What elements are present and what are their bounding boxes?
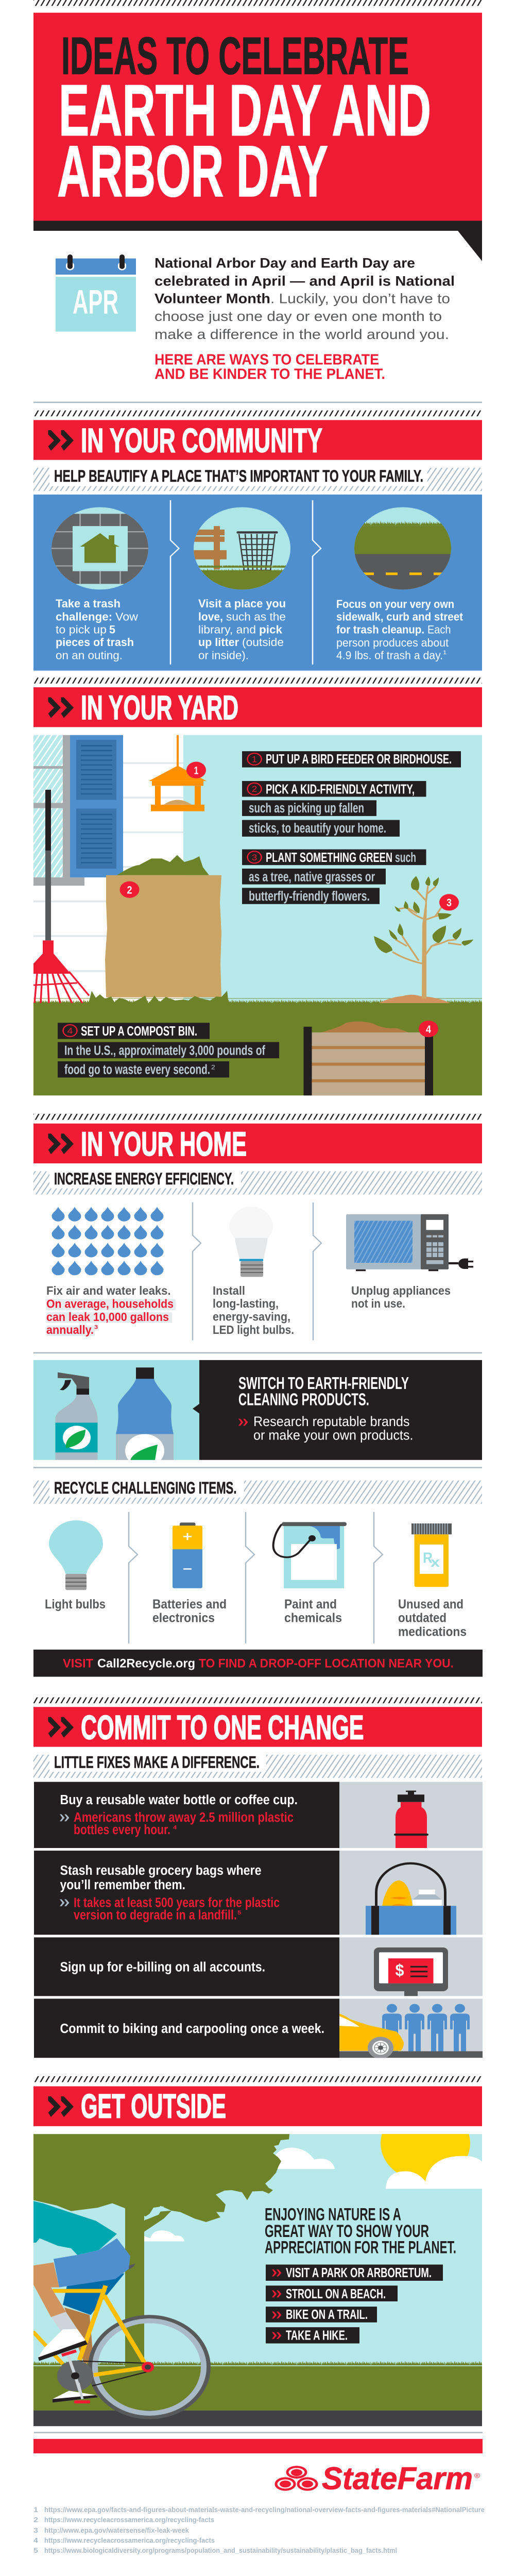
icon: compost bin: [304, 1022, 433, 1095]
callout: compost bin: SET UP A COMPOST BIN.: [81, 1024, 197, 1038]
text: fix leaks: annually.: [46, 1324, 94, 1336]
intro text: Volunteer Month: [154, 291, 270, 307]
text: trash challenge: Vow: [115, 611, 139, 623]
footnotes: https://www.biologicaldiversity.org/programs/population_and_sustainability/sustainability/plastic_bag_facts.html: [44, 2547, 397, 2555]
tag: bike on a trail: BIKE ON A TRAIL.: [286, 2307, 368, 2321]
recycling item labels: electronics: [152, 1611, 215, 1625]
text: unplug appliances: Unplug appliances: [351, 1284, 451, 1298]
text: enjoying nature: ENJOYING NATURE IS A: [265, 2204, 401, 2224]
window and shutter: [33, 735, 123, 886]
text: unplug appliances: not in use.: [351, 1297, 405, 1310]
tag: visit a park: [266, 2265, 443, 2281]
row: reusable bottle: bottles every hour.: [74, 1822, 170, 1837]
number badges: 1: [194, 764, 199, 776]
text: fix leaks: Fix air and water leaks.: [46, 1284, 171, 1298]
text: install LED: energy-saving,: [213, 1310, 290, 1324]
text: trash challenge: challenge:: [56, 611, 112, 623]
row: e-billing: [34, 1937, 483, 1996]
callout: compost bin: [58, 1023, 279, 1077]
text: research brands: [253, 1414, 413, 1443]
clouds: [144, 2148, 482, 2241]
icon: sign and trash can: [191, 507, 290, 592]
tag: visit a park: VISIT A PARK OR ARBORETUM.: [286, 2265, 432, 2280]
subheading: recycle challenging items: [33, 1479, 482, 1504]
icon: spray and cleaner bottles: [56, 1367, 174, 1467]
tag: take a hike: [266, 2327, 359, 2344]
icon: recycle light bulb: [49, 1520, 103, 1590]
intro text: . Luckily, you don’t have to: [270, 291, 450, 307]
text: research brands: or make your own products.: [253, 1428, 413, 1443]
text: focus on your sidewalk: sidewalk, curb and street: [336, 611, 463, 623]
footnotes: [33, 2506, 485, 2555]
footnotes: 3: [33, 2527, 38, 2534]
text: trash challenge: pieces of trash: [56, 636, 134, 649]
footnotes: 1: [33, 2506, 38, 2514]
row: reusable grocery bags: Stash reusable grocery bags where: [60, 1863, 261, 1877]
text: trash challenge: [56, 598, 139, 662]
title banner: [33, 13, 482, 261]
text: visit a place: such as the: [226, 611, 286, 623]
recycling item labels: outdated: [398, 1611, 447, 1625]
row: reusable grocery bags: [34, 1851, 483, 1935]
sun: [381, 2134, 470, 2181]
red call to action: HERE ARE WAYS TO CELEBRATE: [154, 351, 379, 368]
intro text: make a difference in the world around you.: [154, 327, 449, 342]
icon: leaf bag: [89, 855, 229, 1004]
top hatch band: [33, 0, 482, 6]
subheading: increase energy efficiency: [33, 1170, 482, 1194]
callout: bird feeder: 1: [252, 755, 257, 764]
recycling item labels: medications: [398, 1624, 467, 1639]
recycling item labels: Light bulbs: [45, 1597, 106, 1611]
section header: in your home: IN YOUR HOME: [81, 1125, 247, 1163]
text: unplug appliances: [351, 1284, 451, 1310]
number badges: 3: [447, 896, 452, 909]
logo: State Farm: [276, 2462, 480, 2496]
row: reusable grocery bags: you’ll remember them.: [60, 1877, 185, 1892]
icon: young tree: [374, 876, 473, 1003]
section header: in your yard: IN YOUR YARD: [81, 688, 238, 727]
icon: medication bottle: [411, 1523, 452, 1587]
callout: plant something green: PLANT SOMETHING GREEN: [266, 850, 392, 865]
footnotes: http://www.epa.gov/watersense/fix-leak-week: [44, 2527, 190, 2534]
recycling item labels: Unused and: [398, 1597, 464, 1611]
icon: LED bulb: [229, 1207, 273, 1277]
row: reusable bottle: Buy a reusable water bottle or coffee cup.: [60, 1792, 298, 1807]
footnotes: 2: [33, 2516, 38, 2524]
panel: community actions: [33, 495, 482, 671]
closing red bar: [33, 2439, 483, 2453]
subheading: increase energy efficiency: INCREASE ENERGY EFFICIENCY.: [54, 1170, 234, 1188]
text: trash challenge: 5: [109, 623, 115, 636]
callout: kid-friendly activity: such as picking up fallen: [249, 801, 364, 816]
subheading: help beautify: [33, 467, 482, 491]
tag: take a hike: TAKE A HIKE.: [286, 2328, 348, 2343]
icon: medication bottle: x: [431, 1555, 440, 1570]
text: visit a place: pick: [259, 623, 283, 636]
callout: plant something green: 3: [252, 853, 257, 862]
text: install LED: [213, 1284, 294, 1336]
text: fix leaks: [46, 1284, 176, 1336]
panel: yard scene: [33, 735, 482, 1095]
callout: bird feeder: [242, 751, 461, 768]
callout: plant something green: [242, 850, 426, 904]
callout: compost bin: In the U.S., approximately 3,000 pounds of: [64, 1043, 266, 1058]
icon: house in paved lot: [52, 507, 148, 589]
icon: computer bill: [374, 1947, 448, 1996]
logo: State Farm: StateFarm: [322, 2462, 473, 2496]
text: focus on your sidewalk: 1: [443, 649, 447, 656]
callout: compost bin: 2: [211, 1063, 215, 1071]
callout: kid-friendly activity: 2: [252, 784, 257, 794]
tree: [33, 2134, 289, 2367]
number badges: 2: [127, 884, 132, 896]
text: install LED: long-lasting,: [213, 1297, 279, 1310]
icon: carpool: [339, 2004, 483, 2059]
intro text: choose just one day or even one month to: [154, 309, 442, 325]
icon: computer bill: $: [396, 1961, 404, 1980]
text: focus on your sidewalk: for trash cleanup.: [336, 623, 424, 636]
callout bar: call2recycle: Call2Recycle.org: [97, 1656, 195, 1670]
row: reusable grocery bags: It takes at least 500 years for the plastic: [74, 1895, 280, 1910]
text: install LED: LED light bulbs.: [213, 1324, 294, 1336]
recycling item labels: Paint and: [284, 1597, 337, 1611]
row: reusable bottle: Americans throw away 2.5 million plastic: [74, 1810, 294, 1824]
subheading: recycle challenging items: RECYCLE CHALLENGING ITEMS.: [54, 1479, 236, 1497]
intro text: celebrated in April — and April is National: [154, 274, 455, 289]
icon: rake: [33, 790, 89, 1003]
text: visit a place: or inside).: [198, 649, 249, 662]
callout: kid-friendly activity: sticks, to beautify your home.: [249, 821, 386, 836]
text: fix leaks: On average, households: [46, 1298, 174, 1311]
text: focus on your sidewalk: Each: [427, 623, 451, 636]
section header: get outside: GET OUTSIDE: [81, 2087, 226, 2125]
section header: in your community: IN YOUR COMMUNITY: [81, 421, 322, 460]
red call to action: AND BE KINDER TO THE PLANET.: [154, 365, 385, 382]
text: visit a place: [198, 598, 286, 662]
text: trash challenge: to pick up: [56, 623, 107, 636]
text: visit a place: love,: [198, 611, 223, 623]
icon: april calendar: APR: [73, 283, 118, 321]
icon: medication bottle: R: [423, 1549, 433, 1566]
callout: plant something green: as a tree, native grasses or: [249, 870, 375, 884]
icon: bird feeder: [149, 735, 207, 811]
text: fix leaks: 3: [94, 1324, 98, 1330]
number badges: [119, 761, 459, 1037]
row: reusable grocery bags: version to degrade in a landfill.: [74, 1908, 237, 1922]
ground and road: [33, 2366, 482, 2411]
text: focus on your sidewalk: [336, 598, 463, 662]
callout bar: call2recycle: VISIT: [63, 1656, 93, 1670]
callout: compost bin: food go to waste every second.: [64, 1062, 210, 1077]
icon: april calendar: [56, 255, 136, 332]
recycling item labels: chemicals: [284, 1611, 342, 1625]
text: trash challenge: on an outing.: [56, 649, 123, 662]
text: install LED: Install: [213, 1284, 245, 1298]
intro text: [154, 256, 455, 342]
row: reusable grocery bags: 5: [237, 1909, 242, 1916]
row: reusable bottle: 4: [173, 1824, 177, 1831]
number badges: 4: [426, 1023, 431, 1035]
text: research brands: Research reputable brands: [253, 1414, 409, 1430]
section header: in your yard: [33, 687, 482, 727]
text: visit a place: Visit a place you: [198, 598, 286, 611]
callout: plant something green: butterfly-friendly flowers.: [249, 889, 370, 903]
text: visit a place: up litter: [198, 636, 239, 649]
text: focus on your sidewalk: 4.9 lbs. of trash a day.: [336, 649, 443, 662]
panel: earth-friendly cleaning products: [33, 1360, 482, 1467]
text: trash challenge: Take a trash: [56, 598, 121, 611]
text: fix leaks: can leak 10,000 gallons: [46, 1311, 169, 1324]
text: focus on your sidewalk: Focus on your very own: [336, 598, 454, 611]
tag: stroll on a beach: [266, 2285, 398, 2301]
intro text: National Arbor Day and Earth Day are: [154, 256, 415, 271]
subheading: little fixes: [33, 1753, 482, 1778]
logo: State Farm: ®: [474, 2472, 480, 2479]
text: visit a place: (outside: [242, 636, 284, 649]
callout bar: call2recycle: TO FIND A DROP-OFF LOCATION NEAR YOU.: [199, 1656, 454, 1670]
callout: plant something green: such: [395, 850, 416, 865]
icon: microwave: [346, 1214, 473, 1271]
row: biking and carpooling: Commit to biking and carpooling once a week.: [60, 2021, 324, 2036]
text: visit a place: library, and: [198, 623, 256, 636]
icon: battery: [173, 1522, 202, 1588]
row: reusable bottle: [34, 1782, 483, 1848]
callout: kid-friendly activity: [242, 781, 426, 837]
footnotes: 5: [33, 2547, 38, 2555]
row: biking and carpooling: [34, 1998, 483, 2059]
icon: red water bottle: [394, 1791, 428, 1848]
icon: red chevrons: [238, 1419, 248, 1426]
icon: road with curb: [354, 507, 451, 591]
icon: water drops: [52, 1207, 164, 1275]
tag: bike on a trail: [266, 2307, 377, 2323]
icon: grocery bag: [366, 1863, 456, 1935]
cyclist and bicycle: [33, 2201, 209, 2417]
text: enjoying nature: [265, 2208, 455, 2253]
text: focus on your sidewalk: person produces about: [336, 637, 449, 649]
icon: paint can: [273, 1522, 347, 1588]
text: cleaning products: CLEANING PRODUCTS.: [238, 1389, 369, 1409]
footnotes: https://www.recycleacrossamerica.org/recycling-facts: [44, 2516, 214, 2524]
tag: stroll on a beach: STROLL ON A BEACH.: [286, 2286, 386, 2301]
panel: outdoor scene: [33, 2105, 482, 2426]
recycling item labels: Batteries and: [152, 1597, 227, 1611]
red call to action: [154, 351, 385, 382]
section header: in your home: [33, 1124, 482, 1163]
callout: compost bin: 4: [67, 1026, 73, 1036]
footnotes: 4: [33, 2537, 39, 2545]
callout: kid-friendly activity: PICK A KID-FRIENDLY ACTIVITY,: [266, 782, 415, 796]
subheading: little fixes: LITTLE FIXES MAKE A DIFFERENCE.: [54, 1753, 260, 1772]
footnotes: https://www.recycleacrossamerica.org/recycling-facts: [44, 2537, 215, 2545]
recycling item labels: [45, 1597, 467, 1639]
row: e-billing: Sign up for e-billing on all accounts.: [60, 1960, 265, 1974]
callout bar: call2recycle: [33, 1650, 483, 1677]
section header: get outside: [33, 2086, 482, 2126]
